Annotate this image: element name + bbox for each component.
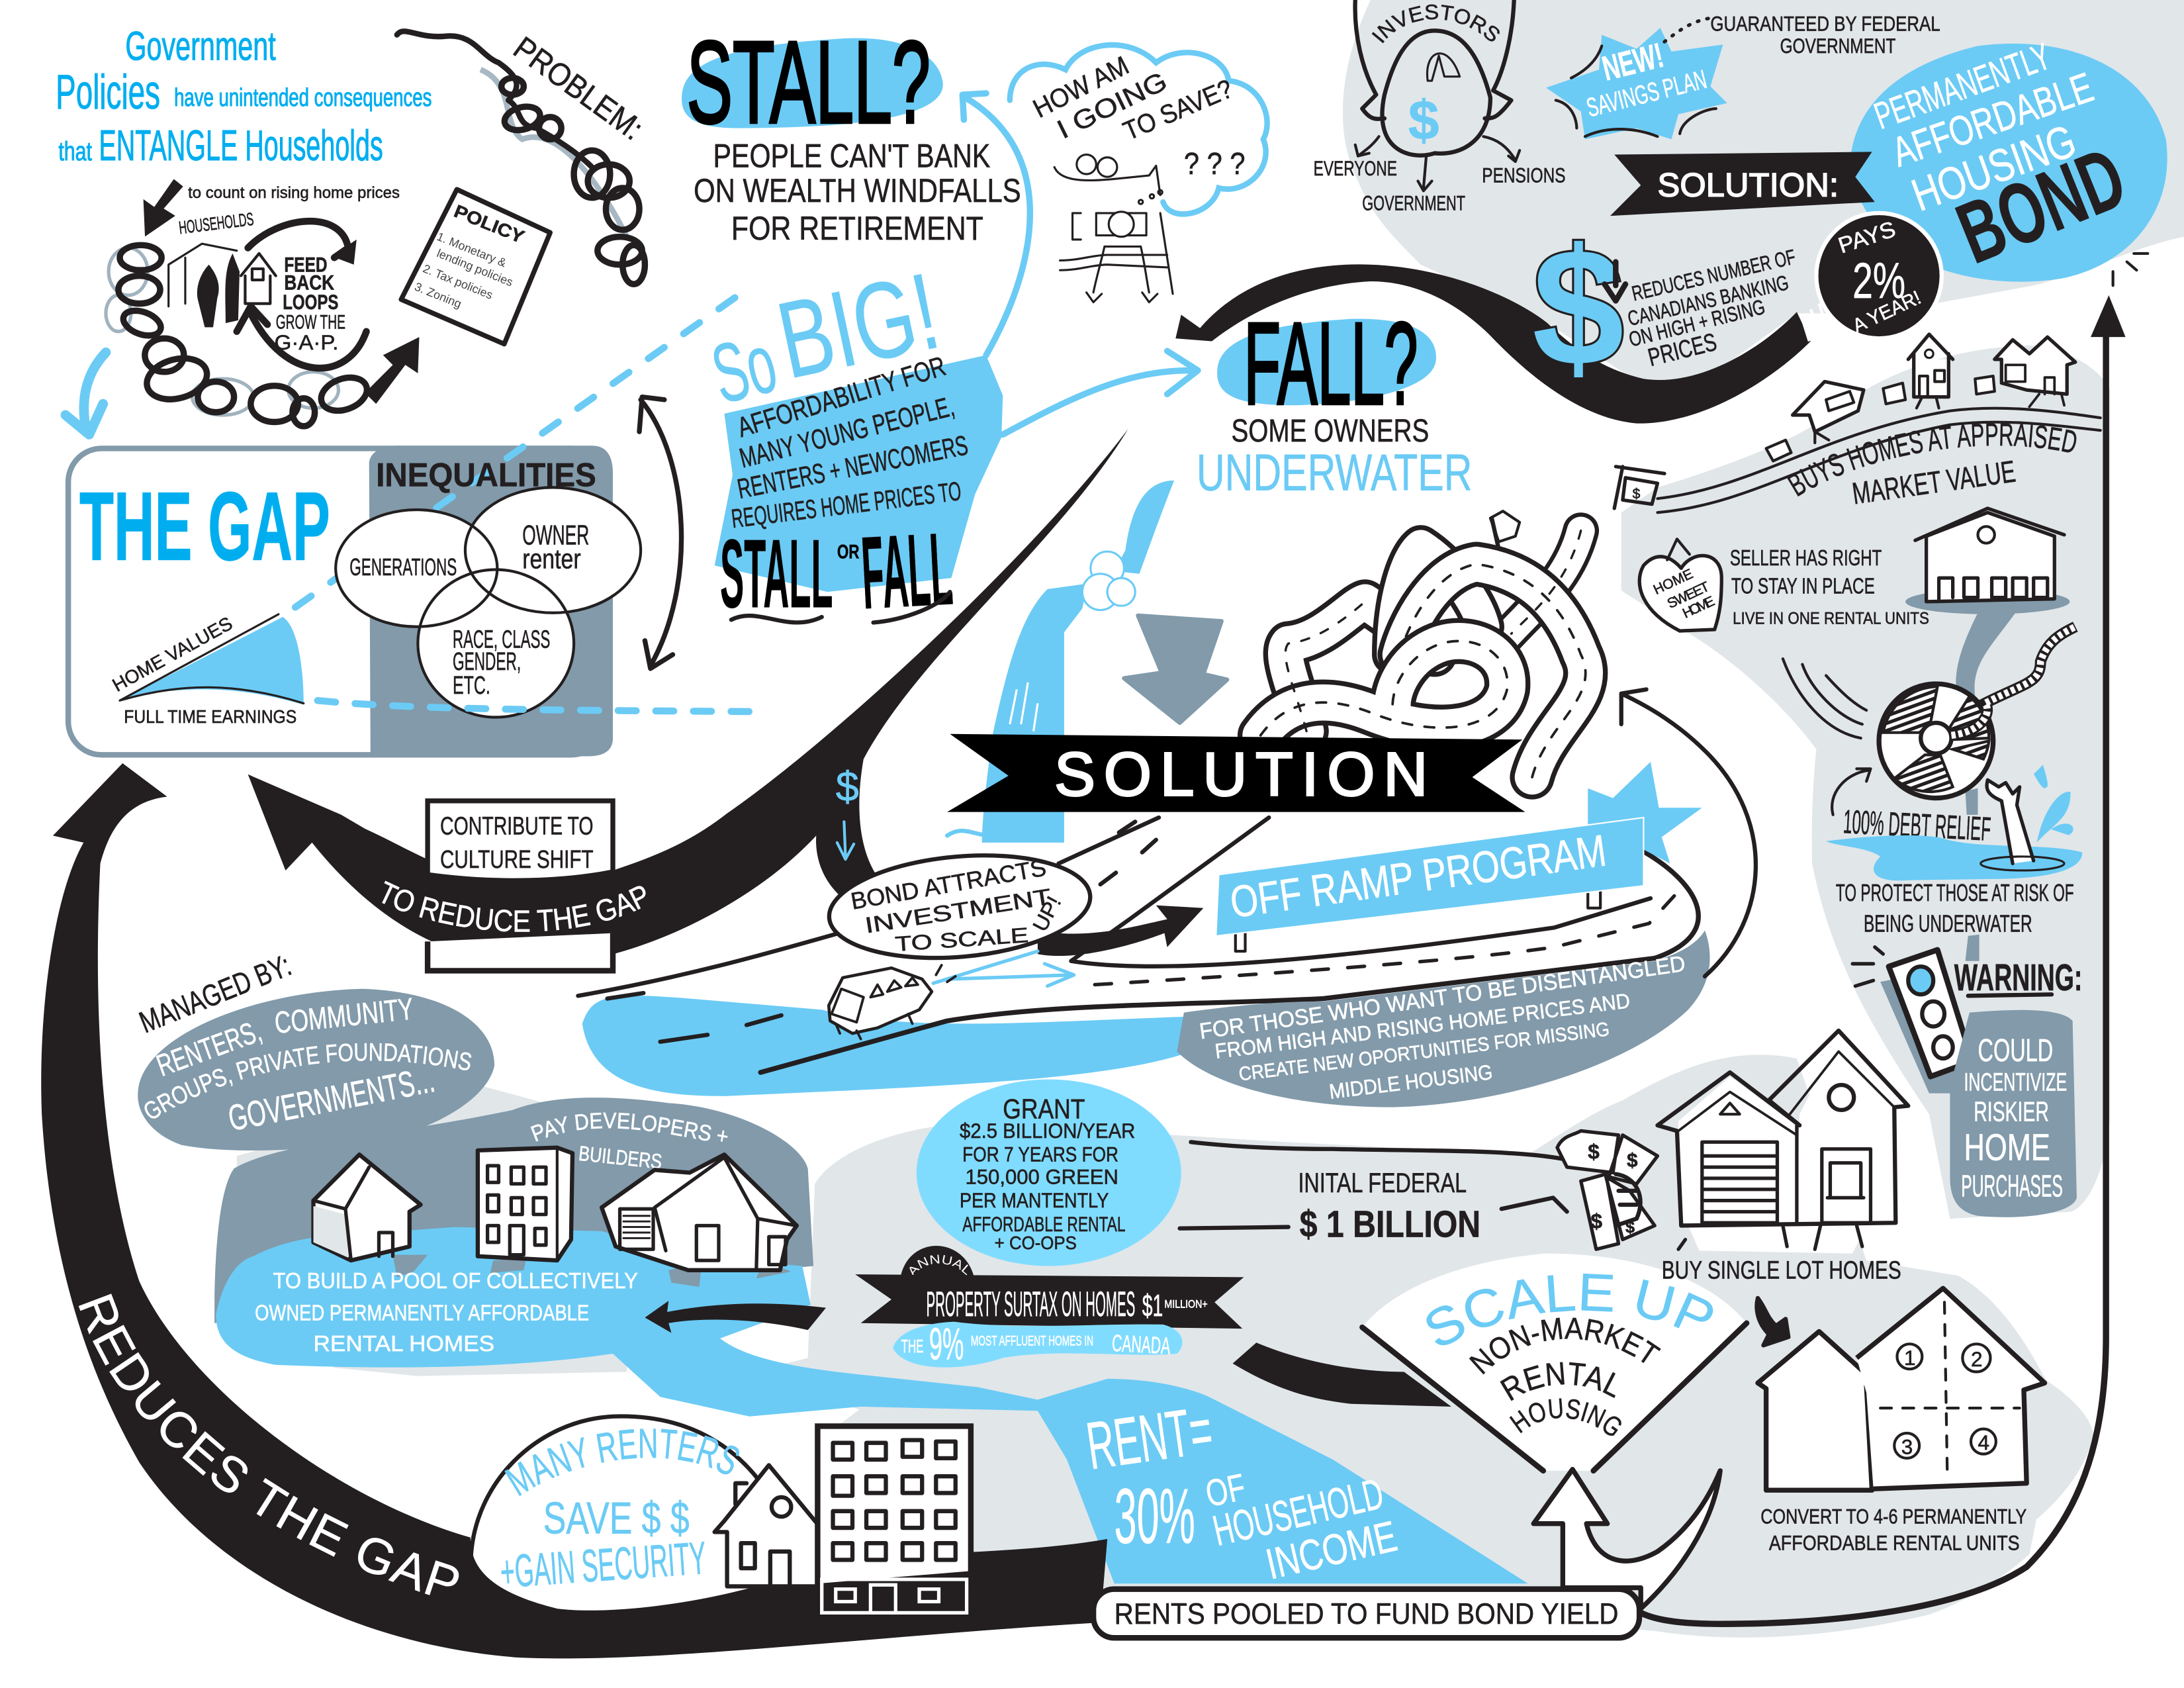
scene: households and home [169, 244, 276, 327]
chart: home values vs earnings [109, 613, 304, 727]
pays 2 percent badge [1801, 213, 1942, 341]
text: rent equals 30 percent: HOUSEHOLD [1208, 1469, 1388, 1555]
fall text [1197, 413, 1473, 502]
panel: so big affordability: REQUIRES HOME PRICES TO [730, 477, 963, 534]
grey off ramp panel: CREATE NEW OPORTUNITIES FOR MISSING [1238, 1018, 1611, 1086]
nine percent capsule: THE [901, 1336, 923, 1356]
big upward arrow with return line [1641, 295, 2126, 1624]
street with homes for sale: $ [1633, 487, 1641, 502]
funding lines and text: INITAL FEDERAL [1298, 1167, 1467, 1198]
down arrow [1604, 262, 1625, 301]
investors pot and arrows: EVERYONE [1314, 156, 1397, 180]
policy card: 1. Monetary & [435, 230, 508, 269]
feedback loop arrows and text: GROW THE [276, 312, 345, 334]
title: government policies: that [58, 137, 92, 166]
venn diagram: OWNER [522, 520, 589, 551]
text: reduces number of canadians: REDUCES NUMBER OF [1629, 244, 1797, 305]
bubble: many renters save: MANY RENTERS [504, 1429, 740, 1496]
bubble: managed by: RENTERS, [152, 1013, 266, 1083]
warning panel: PURCHASES [1961, 1168, 2063, 1203]
grey off ramp panel: FOR THOSE WHO WANT TO BE DISENTANGLED [1198, 952, 1687, 1044]
converted home with 4 units: 1 [1904, 1346, 1916, 1370]
stall heading: STALL? [687, 17, 931, 148]
black arrow to off ramp [1038, 906, 1203, 956]
text: seller has right: TO STAY IN PLACE [1731, 574, 1875, 598]
car with speed lines [829, 951, 1074, 1039]
bubble: many renters save [470, 1414, 758, 1611]
text: seller has right [1730, 546, 1929, 628]
callout: new savings plan burst: SAVINGS PLAN [1584, 65, 1709, 122]
large house with stem [1905, 508, 2070, 710]
nine percent capsule: CANADA [1111, 1330, 1171, 1359]
nine percent capsule [893, 1319, 1183, 1369]
blue arrow to fall [1003, 351, 1198, 434]
fall text: UNDERWATER [1197, 445, 1473, 502]
policy card: 2. Tax policies [421, 261, 495, 302]
policy card: 3. Zoning [413, 280, 463, 310]
solution ribbon top right [1610, 152, 1875, 216]
road arrow from bond to fall [1175, 264, 1811, 424]
callout: bond attracts investment: BOND ATTRACTS [848, 854, 1048, 915]
solution ribbon top right: SOLUTION: [1657, 166, 1839, 204]
bubble: managed by: COMMUNITY [273, 991, 415, 1040]
guarantee note: GUARANTEED BY FEDERAL [1710, 11, 1940, 35]
caption: convert to rental units: AFFORDABLE RENTAL UNITS [1769, 1531, 2020, 1555]
heading: the gap: THE GAP [79, 473, 330, 581]
hand with money: $ [1588, 1139, 1600, 1163]
flag [1490, 511, 1520, 574]
big swoosh: to reduce the gap: TO REDUCE THE GAP [382, 880, 646, 932]
warning heading: WARNING: [1954, 957, 2082, 999]
arrow to converted home [1756, 1298, 1788, 1345]
rents pooled capsule: RENTS POOLED TO FUND BOND YIELD [1115, 1598, 1619, 1630]
property surtax ribbon: PROPERTY SURTAX ON HOMES [927, 1285, 1135, 1324]
grant circle: PER MANTENTLY [960, 1188, 1109, 1212]
so big heading [704, 250, 948, 421]
so big heading: So [704, 316, 786, 421]
feedback loop arrows and text [237, 221, 367, 368]
hand with money: $ [1627, 1150, 1638, 1172]
blue dollar and arrow [836, 764, 859, 859]
thought cloud: ? ? ? [1184, 146, 1246, 181]
text: rent equals 30 percent: 30% [1115, 1472, 1195, 1560]
text: reduces number of canadians: ON HIGH + RISING [1626, 295, 1767, 352]
blue arrow to the gap [66, 352, 106, 434]
off ramp sign [1216, 762, 1702, 951]
heart sign: SWEET [1665, 579, 1712, 612]
title: government policies [56, 23, 432, 169]
property surtax ribbon: $1 [1142, 1288, 1163, 1323]
background: top right grey area [1343, 0, 2184, 404]
big road arrow: reduces the gap: REDUCES THE GAP [78, 1293, 459, 1595]
caption: to count on rising home prices: to count on rising home prices [188, 184, 400, 202]
grant circle: AFFORDABLE RENTAL [962, 1212, 1126, 1236]
investors pot and arrows: $ [1408, 89, 1439, 151]
scale up funnel [1359, 1254, 1750, 1474]
solution ribbon center: SOLUTION [1054, 739, 1428, 808]
pays 2 percent badge: 2% [1852, 253, 1905, 309]
text: rent equals 30 percent: INCOME [1261, 1511, 1401, 1589]
grant circle: $2.5 BILLION/YEAR [960, 1119, 1135, 1143]
chart: home values vs earnings: HOME VALUES [109, 613, 236, 696]
so big heading: BIG! [768, 250, 948, 402]
feedback loop arrows and text: BACK [284, 271, 334, 295]
bubble: managed by: GOVERNMENTS... [225, 1058, 438, 1139]
policy card: lending policies [435, 246, 515, 289]
stall heading [682, 17, 943, 148]
big blue dollar sign: $ [1532, 213, 1624, 400]
label: households: HOUSEHOLDS [177, 209, 255, 238]
grey off ramp panel: FROM HIGH AND RISING HOME PRICES AND [1214, 988, 1631, 1063]
caption: convert to rental units: CONVERT TO 4-6 PERMANENTLY [1760, 1505, 2026, 1528]
warning panel: RISKIER [1974, 1096, 2049, 1127]
venn diagram: renter [522, 543, 581, 574]
problem tangle squiggle [397, 31, 645, 284]
stall text: FOR RETIREMENT [731, 209, 983, 247]
text: rent equals 30 percent [1082, 1393, 1401, 1589]
panel: so big affordability: RENTERS + NEWCOMERS [735, 429, 970, 504]
investors pot and arrows: GOVERNMENT [1362, 191, 1465, 215]
black swoosh into scale up [1233, 1342, 1451, 1407]
panel: so big affordability: OR [837, 541, 860, 563]
nine percent capsule: MOST AFFLUENT HOMES IN [971, 1333, 1093, 1348]
scale up funnel: NON-MARKET [1469, 1317, 1661, 1374]
caption: convert to rental units [1760, 1505, 2026, 1555]
grey off ramp panel [1177, 930, 1710, 1107]
background: right column grey area [1621, 346, 2110, 1219]
venn diagram [336, 487, 641, 718]
grant circle: + CO-OPS [995, 1233, 1077, 1253]
sleepless person in bed [1054, 155, 1173, 303]
text: to protect those at risk: BEING UNDERWATER [1864, 911, 2032, 937]
chart: home values vs earnings: FULL TIME EARNINGS [124, 706, 296, 727]
callout: new savings plan burst: NEW! [1598, 36, 1667, 89]
street with homes for sale [1614, 334, 2101, 512]
text: seller has right: SELLER HAS RIGHT [1730, 546, 1882, 571]
house and apartment block [715, 1426, 971, 1617]
double-headed arrow [639, 397, 682, 669]
big road arrow: reduces the gap [41, 763, 1108, 1659]
heart sign: HOME [1680, 594, 1717, 622]
thought cloud: I GOING [1052, 67, 1172, 144]
bubble: managed by [134, 948, 495, 1150]
text: reduces number of canadians: CANADIANS BANKING [1625, 270, 1791, 330]
text: to build a pool: RENTAL HOMES [314, 1332, 494, 1356]
tangled road [1261, 511, 1586, 777]
two homes for purchase [1657, 1031, 1908, 1249]
callout: bond attracts investment: UP! [1028, 892, 1066, 935]
title: government policies: ENTANGLE Households [99, 121, 383, 169]
scale up funnel: HOUSING [1509, 1398, 1621, 1436]
panel: so big affordability: MANY YOUNG PEOPLE, [737, 391, 958, 474]
text: seller has right: LIVE IN ONE RENTAL UNITS [1733, 610, 1929, 628]
pays 2 percent badge: A YEAR! [1849, 287, 1925, 337]
feedback loop arrows and text: G·A·P. [275, 330, 338, 354]
panel: the gap [68, 285, 752, 756]
property surtax ribbon [855, 1246, 1244, 1329]
text: pay developers: BUILDERS [578, 1141, 663, 1174]
heading: inequalities: INEQUALITIES [376, 455, 596, 493]
fall heading: FALL? [1244, 299, 1418, 429]
waterfall [947, 481, 1174, 843]
grant circle: 150,000 GREEN [965, 1164, 1118, 1188]
feedback loop arrows and text: FEED [284, 252, 328, 276]
dashed line: earnings [318, 700, 766, 712]
solution ribbon center [947, 734, 1525, 812]
callout: new savings plan burst [1546, 28, 1727, 139]
background: white glow beneath houses [1688, 1225, 1866, 1254]
callout: bond attracts investment: TO SCALE [894, 923, 1029, 956]
funding lines and text: $ 1 BILLION [1300, 1203, 1480, 1245]
hand with money: $ [1590, 1209, 1602, 1233]
converted home with 4 units: 3 [1901, 1435, 1913, 1459]
panel: light blue and dark pools [214, 1098, 1528, 1583]
venn diagram: GENERATIONS [349, 554, 457, 581]
grey down arrow [1124, 616, 1227, 723]
sign: culture shift [428, 801, 613, 970]
pays 2 percent badge: PAYS [1835, 217, 1899, 259]
grant circle [917, 1080, 1181, 1266]
nine percent capsule: 9% [929, 1319, 964, 1369]
text: 100% DEBT RELIEF [1843, 802, 1992, 848]
bubble: managed by: MANAGED BY: [134, 948, 296, 1039]
property surtax ribbon: ANNUAL [909, 1255, 968, 1275]
stall text: PEOPLE CAN'T BANK [713, 136, 991, 174]
arrow to pool [645, 1301, 826, 1333]
rents pooled capsule [1093, 1589, 1639, 1638]
hand with money [1557, 1131, 1657, 1249]
warning panel: INCENTIVIZE [1964, 1068, 2067, 1096]
text: to build a pool [255, 1269, 638, 1356]
grey off ramp panel: MIDDLE HOUSING [1328, 1060, 1494, 1103]
grant circle: FOR 7 YEARS FOR [962, 1143, 1118, 1166]
big swoosh: to reduce the gap [248, 429, 1128, 974]
stall text [694, 136, 1021, 247]
warning panel [1950, 1010, 2077, 1217]
guarantee note: GOVERNMENT [1780, 34, 1895, 58]
text: reduces number of canadians: PRICES [1645, 328, 1719, 372]
bond blob: HOUSING [1905, 115, 2083, 221]
small grey connectors [1966, 788, 1979, 961]
text: rent equals 30 percent: RENT= [1082, 1393, 1217, 1483]
title: government policies: Government [125, 23, 276, 68]
title: government policies: have unintended consequences [174, 84, 432, 112]
scale up funnel: SCALE UP [1426, 1274, 1713, 1345]
text: to protect those at risk [1836, 880, 2074, 937]
households loop squiggle [106, 245, 371, 426]
converted home with 4 units: 2 [1971, 1347, 1983, 1371]
panel: so big affordability [715, 350, 1003, 630]
warning panel: HOME [1964, 1127, 2050, 1169]
converted home with 4 units: 4 [1978, 1430, 1989, 1454]
thought cloud: HOW AM [1028, 51, 1134, 124]
fall heading [1217, 299, 1436, 429]
property surtax ribbon: MILLION+ [1164, 1298, 1208, 1311]
text: to build a pool: OWNED PERMANENTLY AFFORDABLE [255, 1301, 589, 1326]
off ramp sign: OFF RAMP PROGRAM [1227, 825, 1610, 927]
venn diagram: RACE, CLASS [453, 626, 550, 653]
sign: culture shift: CULTURE SHIFT [440, 846, 594, 874]
drowning hand and puddle [1826, 769, 2082, 880]
blue dollar and arrow: $ [836, 764, 859, 810]
callout: bond attracts investment: INVESTMENT [864, 885, 1053, 939]
text: pay developers: PAY DEVELOPERS + [531, 1112, 728, 1142]
scale up funnel: RENTAL [1500, 1362, 1615, 1401]
policy card [401, 189, 550, 344]
fall text: SOME OWNERS [1231, 413, 1429, 449]
heart sign: HOME [1651, 566, 1696, 598]
heart sign [1639, 539, 1721, 631]
hand with money: $ [1625, 1218, 1635, 1237]
title: government policies: Policies [56, 64, 160, 119]
background: central lower grey area [752, 1055, 2093, 1638]
arrow into households [145, 181, 181, 234]
bubble: managed by: GROUPS, PRIVATE FOUNDATIONS [144, 1043, 471, 1119]
warning panel: COULD [1978, 1033, 2053, 1068]
life buoy with rope [1783, 627, 2075, 815]
text: rent equals 30 percent: OF [1202, 1466, 1249, 1515]
thought cloud: TO SAVE? [1119, 74, 1237, 146]
arrow to policy [365, 337, 419, 404]
funding lines and text [1180, 1142, 1615, 1245]
bond sparkle [2113, 254, 2148, 285]
investors pot and arrows: INVESTORS [1371, 4, 1500, 44]
investors pot and arrows [1314, 0, 1566, 215]
traffic light [1852, 947, 1972, 1094]
venn diagram: ETC. [453, 672, 490, 700]
sign: culture shift: CONTRIBUTE TO [440, 812, 594, 840]
thought cloud [1010, 45, 1267, 214]
stall text: ON WEALTH WINDFALLS [694, 171, 1021, 209]
text: buys homes at appraised value: BUYS HOMES AT APPRAISED [1787, 424, 2077, 496]
bubble: many renters save: SAVE $ $ [543, 1493, 690, 1543]
panel: so big affordability: FALL [858, 510, 955, 630]
text: pay developers [531, 1112, 728, 1174]
panel: so big affordability: STALL [720, 520, 833, 628]
curved arrow to tangled road [1621, 689, 1756, 976]
bond blob [1851, 36, 2167, 282]
grant circle: GRANT [1003, 1093, 1085, 1124]
guarantee note [1664, 11, 1940, 58]
background: grey area behind developers [237, 1086, 627, 1376]
feedback loop arrows and text: LOOPS [283, 290, 338, 314]
text: buys homes at appraised value: MARKET VALUE [1850, 453, 2018, 511]
problem label: PROBLEM: [507, 30, 650, 147]
houses on pool [314, 1148, 797, 1287]
panel: so big affordability: AFFORDABILITY FOR [734, 350, 949, 443]
text: to build a pool: TO BUILD A POOL OF COLLECTIVELY [273, 1269, 638, 1293]
bond blob: PERMANENTLY [1869, 36, 2056, 138]
caption: buy single lot homes: BUY SINGLE LOT HOMES [1662, 1256, 1901, 1284]
dashed line: rising gap [295, 285, 752, 607]
converted home with 4 units [1758, 1288, 2045, 1490]
callout: bond attracts investment [825, 845, 1095, 968]
bubble: many renters save: +GAIN SECURITY [498, 1532, 707, 1597]
road: water and highway [578, 818, 1698, 1096]
blue arrow to stall [962, 93, 1030, 355]
text: reduces number of canadians [1625, 244, 1797, 372]
venn diagram: GENDER, [453, 648, 521, 676]
investors pot and arrows: PENSIONS [1482, 164, 1566, 187]
policy card: POLICY [451, 201, 527, 247]
white up arrow with swoosh [1533, 1470, 1720, 1609]
bond blob: AFFORDABLE [1886, 64, 2099, 176]
